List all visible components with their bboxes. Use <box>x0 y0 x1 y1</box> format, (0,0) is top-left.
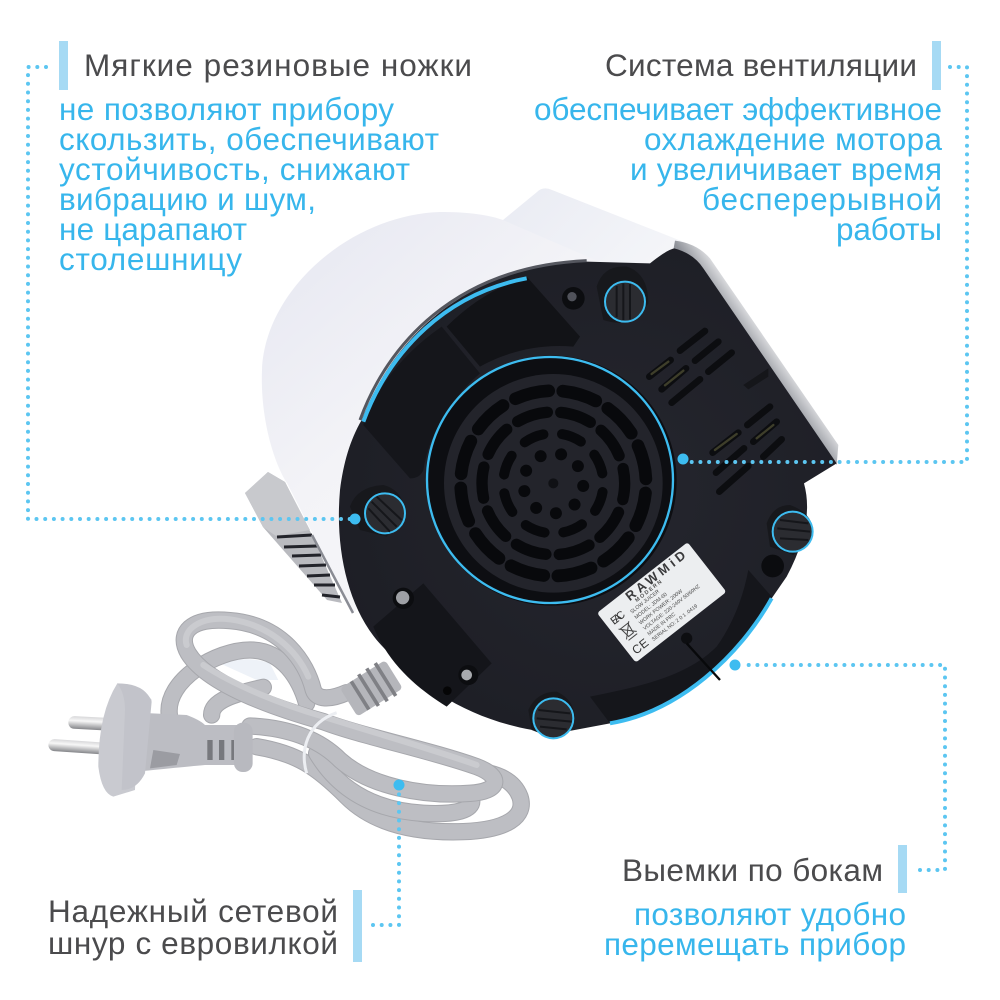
ventilation slots <box>649 331 782 492</box>
heading: Надежный сетевой <box>48 893 338 929</box>
rubber foot left <box>350 485 405 537</box>
pale area inside cord loop <box>220 659 278 680</box>
heading: Мягкие резиновые ножки <box>84 47 472 83</box>
accent bar <box>59 41 68 90</box>
heading: Выемки по бокам <box>622 852 883 888</box>
description: охлаждение мотора <box>644 121 942 157</box>
description: бесперерывной <box>702 181 942 217</box>
callout: ventilation <box>534 41 967 464</box>
side recess right <box>447 277 580 367</box>
label specs: VOLTAGE: 220-240V 50/60HZ <box>642 584 701 632</box>
description <box>534 91 942 247</box>
side clip and grille <box>245 472 353 613</box>
certification marks: EAC <box>609 609 628 627</box>
description: не царапают <box>59 211 247 247</box>
rear block <box>500 188 684 300</box>
accent bar <box>932 41 941 90</box>
callout: power cord: шнур с евровилкой <box>48 925 338 961</box>
description: не позволяют прибору <box>59 91 394 127</box>
gray body edge <box>360 261 587 420</box>
side recess left <box>363 327 480 478</box>
description <box>604 896 906 962</box>
front cord loop <box>184 619 495 794</box>
callout: power cord <box>48 780 404 962</box>
leader line <box>373 791 399 925</box>
callout: side recesses <box>604 660 945 962</box>
cord slit <box>687 643 720 680</box>
description: вибрацию и шум, <box>59 181 316 217</box>
rating label: MODERN <box>634 579 663 604</box>
description: и увеличивает время <box>630 151 942 187</box>
leader line <box>741 665 945 870</box>
cord tie <box>304 713 337 773</box>
metallic rim <box>673 241 838 465</box>
screws <box>393 287 784 695</box>
plug pins <box>48 716 129 755</box>
base body <box>339 248 837 733</box>
description <box>59 91 439 277</box>
brand name: RAWMiD <box>622 548 688 604</box>
rating label <box>596 541 726 663</box>
label specs: MADE IN PRC <box>647 612 677 637</box>
rubber foot right <box>767 505 813 555</box>
description: столешницу <box>59 241 242 277</box>
label specs: SLOW JUICER <box>629 589 661 615</box>
label specs: MODEL: JDM-60 <box>634 592 669 621</box>
leader line <box>688 67 967 462</box>
strain relief grommet <box>338 658 404 719</box>
leader line <box>28 67 350 519</box>
label specs: SERIAL NO: 2 0 1 .0419 <box>651 603 699 643</box>
fan recess blue ring <box>427 357 673 603</box>
power cord with plug <box>48 619 521 832</box>
accent bar <box>353 890 362 962</box>
description: устойчивость, снижают <box>59 151 410 187</box>
rubber foot bottom <box>528 692 575 738</box>
certification marks <box>608 608 651 657</box>
bottom recess <box>590 570 772 723</box>
description: обеспечивает эффективное <box>534 91 942 127</box>
label specs <box>629 567 710 643</box>
heading: Система вентиляции <box>605 47 917 83</box>
certification marks: CE <box>629 636 651 657</box>
description: скользить, обеспечивают <box>59 121 439 157</box>
fan grille <box>444 374 663 593</box>
cable bracket plate <box>373 583 492 707</box>
blue edge arcs <box>363 278 772 723</box>
callout: rubber feet <box>28 41 472 524</box>
description: перемещать прибор <box>604 926 906 962</box>
rubber foot top <box>597 267 648 323</box>
juicer white housing <box>245 188 684 613</box>
description: позволяют удобно <box>634 896 906 932</box>
cylinder <box>262 212 600 613</box>
label specs: WORK POWER: 200W <box>638 589 684 626</box>
accent bar <box>898 845 907 893</box>
description: работы <box>836 211 942 247</box>
fan recess <box>427 356 677 606</box>
juicer base <box>339 241 838 738</box>
back cord loops <box>169 650 521 832</box>
plug body <box>98 683 253 797</box>
